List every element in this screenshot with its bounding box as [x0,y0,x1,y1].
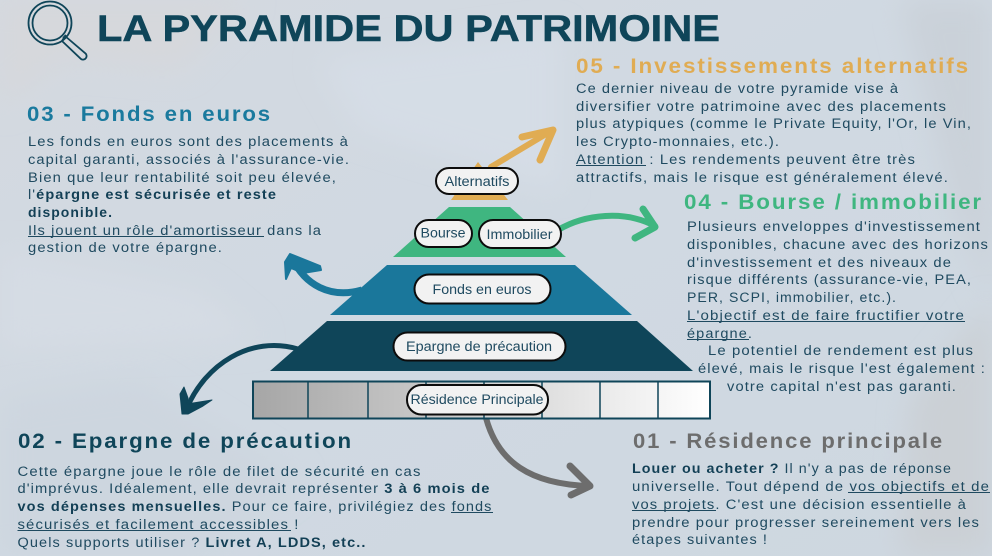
panel: 03 fonds en euros [27,102,350,255]
level: bourse immobilier [393,207,566,257]
panel: 01 residence principale [632,429,990,547]
level: residence principale: Résidence Principale [410,392,544,408]
text block: 04 [687,219,989,394]
panel: 05 investissements alternatifs [576,54,972,185]
level: bourse immobilier: Bourse [420,226,466,242]
text block: 02: vos dépenses mensuelles. Pour ce faire, privilégiez des fonds [18,499,492,514]
text block: 01: prendre pour progresser sereinement vers les [632,515,980,530]
arrow: gold to 05 [491,130,553,167]
text block: 04: Le potentiel de rendement est plus [708,343,974,358]
text block: 02: Quels supports utiliser ? Livret A, LDDS, etc.. [18,535,366,550]
text block: 02 [18,464,493,550]
text block: 04: risque différents (assurance-vie, PEA, [687,272,972,287]
heading: 05: 05 - Investissements alternatifs [576,54,970,78]
text block: 05: Attention : Les rendements peuvent être très [576,152,916,167]
title: LA PYRAMIDE DU PATRIMOINE [97,8,720,49]
level: epargne de precaution [270,321,693,371]
text block: 01: vos projets. C'est une décision essentielle à [632,497,967,512]
text block: 05 [576,81,972,185]
text block: 04: votre capital n'est pas garanti. [727,379,957,394]
text block: 03: capital garanti, associés à l'assurance-vie. [28,152,350,167]
text block: 04: d'investissement et des niveaux de [687,255,952,270]
text block: 03: disponible. [28,205,113,220]
level: fonds en euros: Fonds en euros [432,282,532,298]
text block: 05: plus atypiques (comme le Private Equity, l'Or, le Vin, [576,116,972,131]
heading: 02: 02 - Epargne de précaution [18,429,353,453]
text block: 04: disponibles, chacune avec des horizons [687,237,989,252]
text block: 04: PER, SCPI, immobilier, etc.). [687,290,897,305]
text block: 04: L'objectif est de faire fructifier votre [687,308,965,323]
text block: 03: Ils jouent un rôle d'amortisseur dans la [28,223,322,238]
arrow: gray to 01 [486,418,590,495]
text block: 05: les Crypto-monnaies, etc.). [576,134,780,149]
text block: 03: gestion de votre épargne. [28,240,223,255]
text block: 02: d'imprévus. Idéalement, elle devrait représenter 3 à 6 mois de [18,481,490,496]
text block: 01: étapes suivantes ! [632,532,768,547]
text block: 01: universelle. Tout dépend de vos objectifs et de [632,479,990,494]
text block: 02: sécurisés et facilement accessibles ! [18,517,300,532]
level: fonds en euros [330,265,632,315]
level: alternatifs [436,162,518,200]
text block: 01 [632,461,990,547]
arrow: blue to 03 [285,254,362,293]
text block: 04: élevé, mais le risque l'est également : [698,361,986,376]
panel: 04 bourse immobilier [684,190,989,394]
text block: 02: Cette épargne joue le rôle de filet de sécurité en cas [18,464,422,479]
icon: magnifying glass [28,2,87,60]
arrow: green to 04 [558,209,655,238]
text block: 01: Louer ou acheter ? Il n'y a pas de réponse [632,461,952,476]
text block: 03 [28,134,350,255]
arrow: dark to 02 [180,346,298,414]
heading: 04: 04 - Bourse / immobilier [684,190,983,214]
level: alternatifs: Alternatifs [444,174,510,190]
text block: 03: Bien que leur rentabilité soit peu élevée, [28,170,337,185]
text block: 04: Plusieurs enveloppes d'investissement [687,219,981,234]
text block: 03: Les fonds en euros sont des placements à [28,134,349,149]
text block: 05: Ce dernier niveau de votre pyramide vise à [576,81,899,96]
level: residence principale [253,381,710,419]
pyramid [253,162,710,419]
level: epargne de precaution: Epargne de précaution [406,339,552,355]
heading: 03: 03 - Fonds en euros [27,102,272,126]
heading: 01: 01 - Résidence principale [633,429,944,453]
text block: 03: l'épargne est sécurisée et reste [28,187,277,202]
panel: 02 epargne de precaution [18,429,493,550]
level: bourse immobilier: Immobilier [486,227,553,243]
text block: 04: épargne. [687,326,753,341]
text block: 05: attractifs, mais le risque est généralement élevé. [576,170,949,185]
text block: 05: diversifier votre patrimoine avec des placements [576,99,947,114]
